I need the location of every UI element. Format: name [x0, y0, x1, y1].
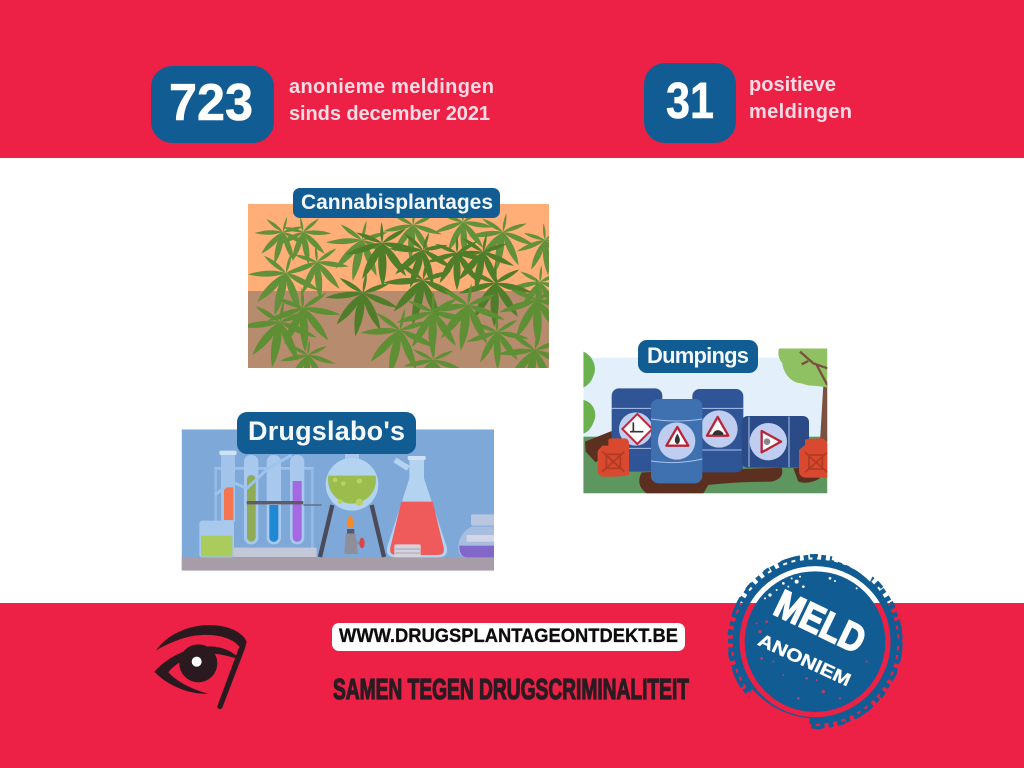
caption 723: sinds december 2021	[289, 103, 490, 125]
label: Drugslabo's	[237, 412, 416, 454]
statistic: 723 anonymous reports	[151, 66, 494, 143]
label: Dumpings	[638, 340, 758, 373]
stamp: meld anoniem: MELD	[768, 582, 872, 662]
number badge 31	[644, 63, 736, 143]
label: Dumpings: Dumpings	[647, 343, 749, 368]
panel: drug labs	[182, 412, 498, 571]
top red band	[0, 0, 1024, 158]
illustration: cannabis plants	[248, 204, 549, 368]
caption 31: positieve	[749, 74, 836, 96]
panel: cannabis plantations	[248, 188, 549, 368]
label: Drugslabo's: Drugslabo's	[248, 416, 405, 446]
caption 723: anonieme meldingen	[289, 76, 494, 98]
panel: dumpings	[583, 340, 827, 493]
label: Cannabisplantages: Cannabisplantages	[301, 191, 493, 214]
caption 31	[749, 74, 852, 123]
website address pill: WWW.DRUGSPLANTAGEONTDEKT.BE	[339, 626, 678, 647]
stamp: meld anoniem	[729, 552, 901, 728]
number badge 723	[151, 66, 274, 143]
stamp: meld anoniem: ANONIEM	[755, 630, 854, 690]
caption 31: meldingen	[749, 101, 852, 123]
icon: eye logo	[154, 625, 247, 709]
illustration: chemical barrels	[583, 348, 827, 493]
number badge 31: 31	[666, 72, 714, 129]
illustration: laboratory glassware	[182, 429, 498, 571]
caption 723	[289, 76, 494, 125]
statistic: 31 positive reports	[644, 63, 852, 143]
slogan: SAMEN TEGEN DRUGSCRIMINALITEIT	[333, 674, 689, 706]
bottom red band	[0, 603, 1024, 768]
number badge 723: 723	[169, 74, 253, 132]
